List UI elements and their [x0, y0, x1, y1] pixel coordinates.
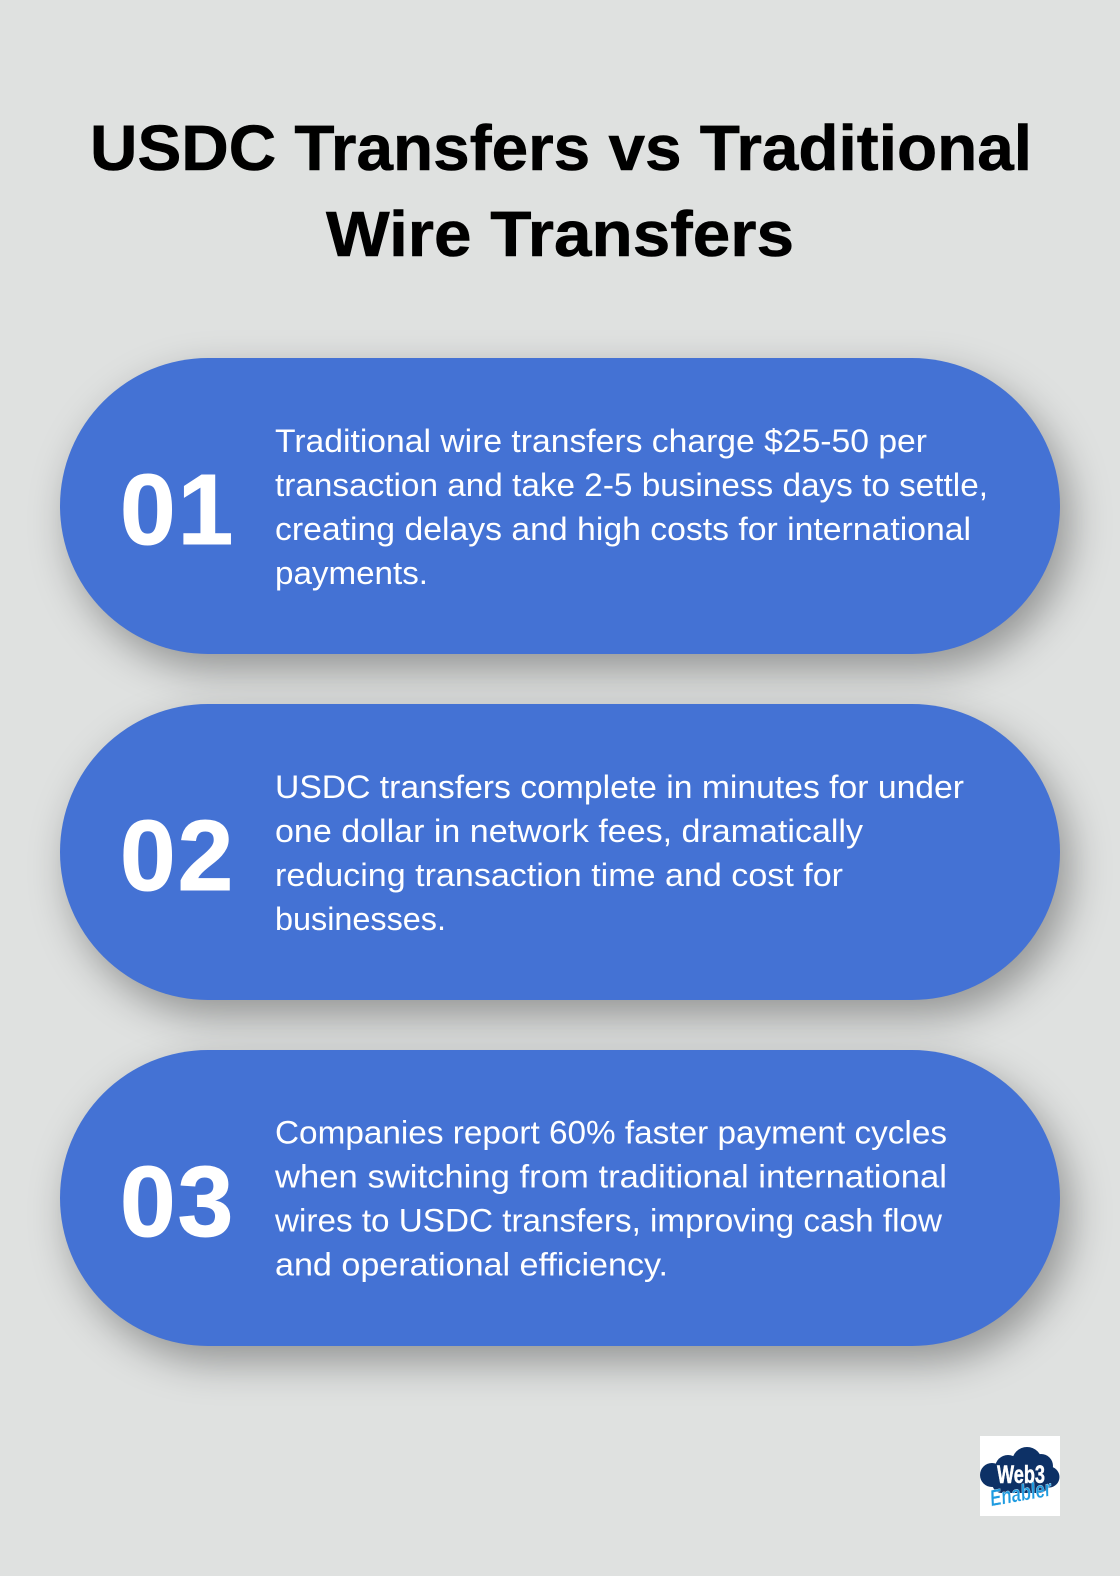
step number 01: 01 — [120, 454, 235, 566]
panel: step 03 — [60, 1050, 1060, 1346]
step number 03: 03 — [120, 1146, 235, 1258]
text block: step 01 description: Traditional wire transfers charge $25-50 per — [275, 423, 927, 459]
icon: Web3 Enabler logo: Enabler — [988, 1475, 1054, 1511]
text block: step 03 description: and operational efficiency. — [275, 1246, 668, 1282]
text block: step 03 description: wires to USDC transfers, improving cash flow — [274, 1202, 943, 1238]
text block: step 03 description: when switching from traditional international — [274, 1158, 947, 1194]
title — [90, 112, 1032, 270]
title: Wire Transfers — [326, 198, 794, 270]
panel: step 01 — [60, 358, 1060, 654]
step number 02: 02 — [120, 800, 235, 912]
text block: step 01 description: transaction and take 2-5 business days to settle, — [275, 467, 988, 503]
text block: step 03 description — [274, 1114, 947, 1282]
text block: step 01 description: payments. — [275, 555, 428, 591]
title: USDC Transfers vs Traditional — [90, 112, 1032, 184]
icon: Web3 Enabler logo — [980, 1436, 1060, 1516]
text block: step 02 description: businesses. — [275, 901, 446, 937]
icon: Web3 Enabler logo: Web3 — [997, 1461, 1045, 1489]
text block: step 02 description: reducing transaction time and cost for — [275, 857, 843, 893]
text block: step 02 description — [275, 769, 964, 937]
text block: step 01 description — [275, 423, 988, 591]
text block: step 02 description: USDC transfers complete in minutes for under — [275, 769, 964, 805]
panel: step 02 — [60, 704, 1060, 1000]
text block: step 01 description: creating delays and high costs for international — [275, 511, 971, 547]
text block: step 03 description: Companies report 60% faster payment cycles — [275, 1114, 947, 1150]
text block: step 02 description: one dollar in network fees, dramatically — [275, 813, 864, 849]
